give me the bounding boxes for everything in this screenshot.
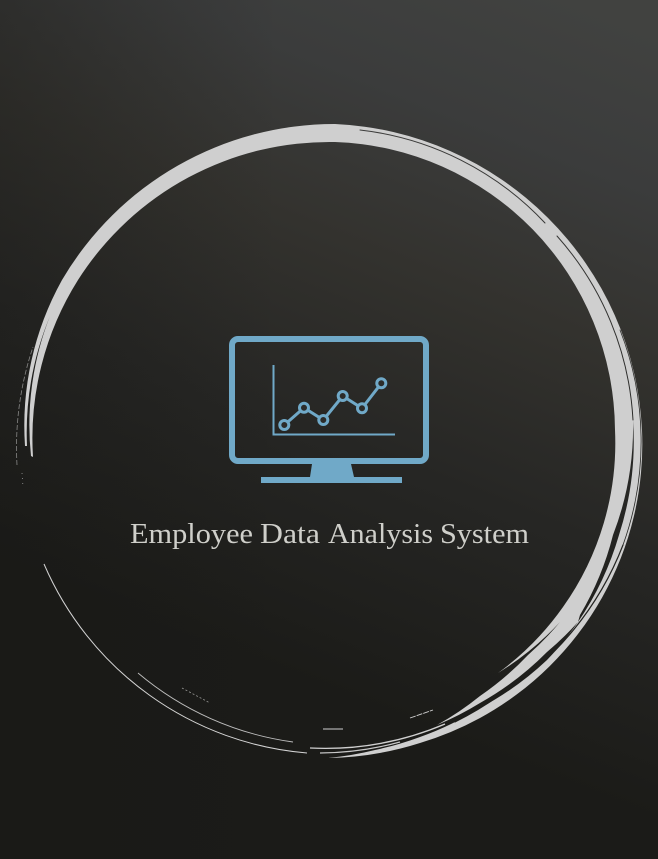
- second thin bottom strand: [138, 673, 293, 742]
- dark bristle cuts in the band: [360, 130, 641, 722]
- lower bottom strand: [320, 742, 400, 753]
- monitor stand: [261, 464, 402, 483]
- gap between right side strands: [578, 420, 634, 622]
- monitor screen frame: [232, 339, 426, 461]
- title: [130, 518, 529, 550]
- title: Data: [260, 518, 320, 550]
- title: Analysis: [328, 518, 433, 550]
- chart axes: [274, 365, 395, 434]
- brush stroke circle: [17, 124, 642, 758]
- main brush band: [24, 124, 642, 758]
- bottom strand joining band: [310, 724, 445, 748]
- chart line: [284, 383, 381, 425]
- title: Employee: [130, 518, 253, 550]
- thin lower left strand: [44, 564, 307, 753]
- title: System: [440, 518, 529, 550]
- chart points: [280, 379, 386, 430]
- icon: monitor with line chart: [232, 339, 426, 483]
- short bristle dashes: [17, 347, 433, 729]
